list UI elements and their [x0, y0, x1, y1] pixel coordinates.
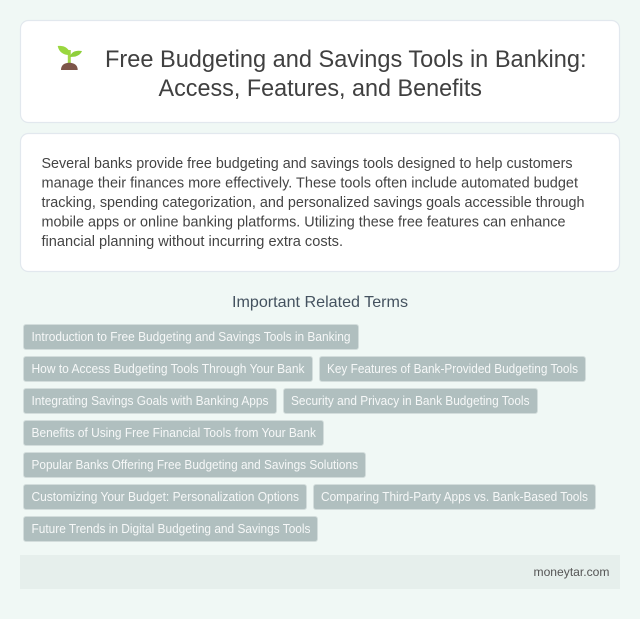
text block: description: mobile apps or online banking platforms. Utilizing these free features can enhance	[42, 214, 566, 230]
tag	[24, 356, 312, 382]
tag	[24, 388, 276, 414]
tag: Security and Privacy in Bank Budgeting Tools	[291, 394, 530, 408]
heading: related terms: Important Related Terms	[232, 294, 408, 311]
tag: Popular Banks Offering Free Budgeting and Savings Solutions	[32, 458, 358, 472]
text block: description: manage their finances more effectively. These tools often include automated budget	[42, 176, 578, 192]
panel: description card	[20, 134, 620, 272]
icon: seedling	[58, 46, 82, 70]
text block: description: tracking, spending categorization, and personalized savings goals accessible through	[42, 195, 584, 211]
title: Free Budgeting and Savings Tools in Banking:	[105, 46, 586, 73]
tag	[24, 516, 318, 542]
tag: Customizing Your Budget: Personalization Options	[32, 490, 299, 504]
tag	[24, 420, 324, 446]
tag	[24, 324, 358, 350]
title	[105, 46, 586, 102]
tag	[320, 356, 586, 382]
tag	[24, 484, 306, 510]
tag	[284, 388, 538, 414]
tag: Future Trends in Digital Budgeting and Savings Tools	[32, 522, 310, 536]
text block: description	[42, 156, 584, 250]
tag	[24, 452, 366, 478]
text block: description: financial planning without incurring extra costs.	[42, 234, 343, 250]
tag: How to Access Budgeting Tools Through Your Bank	[32, 362, 305, 376]
footer text: source: moneytar.com	[534, 565, 610, 579]
tag: Key Features of Bank-Provided Budgeting Tools	[327, 362, 578, 376]
tag: Comparing Third-Party Apps vs. Bank-Based Tools	[321, 490, 588, 504]
footer	[20, 555, 620, 589]
tag list: related terms	[24, 324, 596, 542]
tag	[314, 484, 596, 510]
tag: Benefits of Using Free Financial Tools from Your Bank	[32, 426, 317, 440]
text block: description: Several banks provide free budgeting and savings tools designed to help customers	[42, 156, 572, 172]
panel: title card	[20, 20, 620, 122]
tag: Introduction to Free Budgeting and Savings Tools in Banking	[32, 330, 350, 344]
title: Access, Features, and Benefits	[158, 75, 482, 102]
tag: Integrating Savings Goals with Banking Apps	[32, 394, 268, 408]
